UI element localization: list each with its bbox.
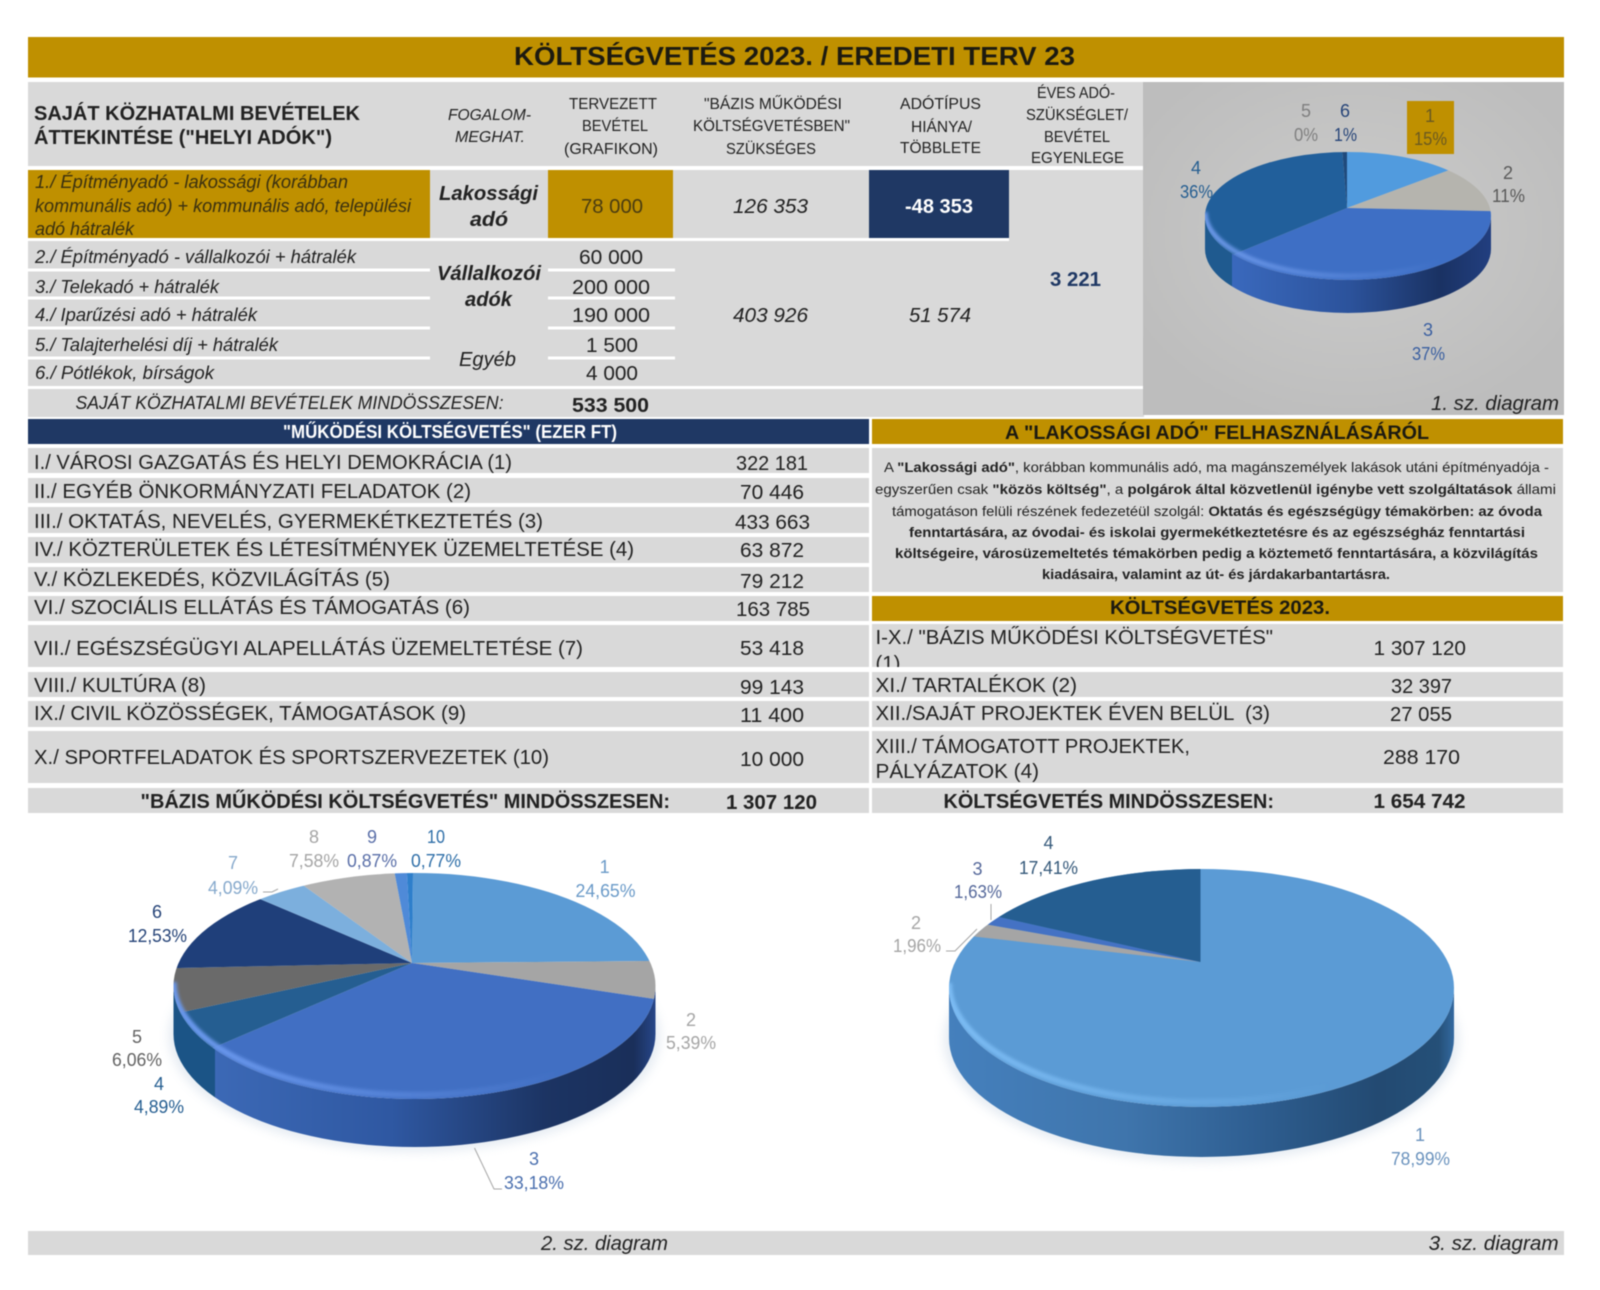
- operating budget rows: VII./ EGÉSZSÉGÜGYI ALAPELLÁTÁS ÜZEMELTETÉSE (7): [34, 637, 583, 660]
- operating budget rows: 99 143: [740, 677, 804, 699]
- table highlight cells: [28, 166, 1144, 389]
- column headers: TERVEZETT: [569, 96, 658, 113]
- budget 2023 rows: I-X./ "BÁZIS MŰKÖDÉSI KÖLTSÉGVETÉS": [876, 626, 1273, 649]
- planned revenue values: 533 500: [572, 395, 649, 417]
- pie 3 labels: 1,63%: [954, 882, 1002, 902]
- pie 1 labels: 15%: [1414, 129, 1447, 149]
- budget 2023 rows: 1 307 120: [1374, 638, 1466, 660]
- column headers: KÖLTSÉGVETÉSBEN": [693, 117, 850, 135]
- pie 2 labels: 4,09%: [208, 878, 258, 898]
- budget 2023 rows: XI./ TARTALÉKOK (2): [876, 674, 1077, 697]
- tax categories: Egyéb: [459, 349, 516, 371]
- planned revenue values: [572, 196, 650, 417]
- operating budget rows: 79 212: [740, 571, 804, 593]
- pie 3 labels: 3: [972, 859, 983, 879]
- tax rows: 5./ Talajterhelési díj + hátralék: [35, 335, 279, 355]
- planned revenue values: 1 500: [586, 335, 638, 357]
- budget 2023 rows: [872, 624, 1563, 813]
- pie 2 labels: 6: [152, 902, 162, 922]
- tax categories: [437, 183, 541, 371]
- operating budget rows: I./ VÁROSI GAZGATÁS ÉS HELYI DEMOKRÁCIA (1): [34, 451, 512, 474]
- pie 2 labels: 9: [367, 827, 377, 847]
- pie 2 labels: 0,87%: [347, 851, 397, 871]
- operating budget rows: [28, 448, 869, 814]
- planned revenue values: 78 000: [581, 196, 643, 218]
- budget 2023 rows: KÖLTSÉGVETÉS MINDÖSSZESEN:: [944, 790, 1274, 813]
- tax rows: kommunális adó) + kommunális adó, települési: [35, 196, 412, 216]
- column headers: [448, 85, 1129, 167]
- base budget need, balance and annual values: 3 221: [1050, 269, 1101, 291]
- tax rows: 1./ Építményadó - lakossági (korábban: [35, 172, 348, 192]
- table heading: [34, 102, 361, 149]
- residential tax explanation: egyszerűen csak "közös költség" , a polgárok által közvetlenül igénybe vett szolgáltatások állami: [875, 481, 1556, 497]
- operating budget rows: VI./ SZOCIÁLIS ELLÁTÁS ÉS TÁMOGATÁS (6): [34, 596, 470, 619]
- footer caption bar: 3. sz. diagram: [1429, 1233, 1559, 1255]
- tax categories: adó: [470, 209, 508, 231]
- pie 3 labels: [893, 833, 1450, 1169]
- footer caption bar: 2. sz. diagram: [540, 1233, 668, 1255]
- operating budget rows: IX./ CIVIL KÖZÖSSÉGEK, TÁMOGATÁSOK (9): [34, 702, 466, 725]
- residential tax explanation: A "Lakossági adó" , korábban kommunális adó, ma magánszemélyek lakások utáni építményadója -: [884, 459, 1549, 475]
- base budget need, balance and annual values: 403 926: [733, 305, 809, 327]
- column headers: MEGHAT.: [455, 129, 525, 146]
- residential tax explanation: költségeire, városüzemeltetés témakörben pedig a köztemető fenntartására, a közvilágítás: [895, 545, 1538, 561]
- pie 1 labels: [1180, 101, 1525, 364]
- budget 2023 rows: PÁLYÁZATOK (4): [876, 760, 1039, 783]
- column headers: HIÁNYA/: [911, 119, 973, 136]
- operating budget rows: 10 000: [740, 749, 804, 771]
- column headers: SZÜKSÉGLET/: [1026, 106, 1129, 124]
- pie 2 labels: 4: [154, 1074, 164, 1094]
- base budget need, balance and annual values: -48 353: [905, 196, 973, 218]
- operating budget rows: 63 872: [740, 540, 804, 562]
- operating budget rows: II./ EGYÉB ÖNKORMÁNYZATI FELADATOK (2): [34, 480, 471, 503]
- tax categories: adók: [465, 289, 513, 311]
- pie chart 3: [942, 868, 1462, 1164]
- budget 2023 rows: 288 170: [1383, 747, 1460, 769]
- operating budget rows: 322 181: [736, 453, 808, 475]
- pie 2 labels: 7: [228, 853, 238, 873]
- operating budget rows: 433 663: [735, 512, 810, 534]
- operating budget header: [28, 419, 869, 444]
- operating budget rows: 70 446: [740, 482, 804, 504]
- pie 2 labels: 4,89%: [134, 1097, 184, 1117]
- pie 2 labels: 7,58%: [289, 851, 339, 871]
- panel: local tax revenue table: [28, 82, 1144, 417]
- tax categories: Lakossági: [439, 183, 538, 205]
- pie 3 labels: 2: [911, 913, 921, 933]
- pie 2 labels: 6,06%: [112, 1050, 162, 1070]
- column headers: SZÜKSÉGES: [726, 140, 816, 158]
- column headers: BEVÉTEL: [1044, 129, 1110, 146]
- pie 3 labels: 1,96%: [893, 936, 941, 956]
- pie 2 labels: 8: [309, 827, 319, 847]
- residential tax explanation: fenntartására, az óvodai- és iskolai gyermekétkeztetésre és az egészségház fenntartási: [909, 524, 1525, 540]
- operating budget rows: 163 785: [736, 599, 810, 621]
- column headers: ÉVES ADÓ-: [1037, 85, 1115, 102]
- title bar: KÖLTSÉGVETÉS 2023. / EREDETI TERV 23: [514, 41, 1075, 71]
- pie 2 labels: 1: [600, 857, 610, 877]
- planned revenue values: 200 000: [572, 277, 650, 299]
- panel: budget 2023 table: [872, 596, 1563, 813]
- pie 2 labels: 24,65%: [576, 881, 636, 901]
- panel: chart 1: [1142, 82, 1564, 416]
- residential tax header: [872, 419, 1563, 444]
- residential tax header: A "LAKOSSÁGI ADÓ" FELHASZNÁLÁSÁRÓL: [1005, 422, 1429, 444]
- pie 2 labels: 5: [132, 1027, 142, 1047]
- residential tax explanation: [872, 448, 1563, 592]
- pie 2 labels: 0,77%: [411, 851, 461, 871]
- residential tax explanation: támogatáson felüli részének fedezetéül szolgál: Oktatás és egészségügy témakörben: az óvoda: [892, 503, 1542, 519]
- pie 3 labels: 17,41%: [1019, 858, 1078, 878]
- table heading: SAJÁT KÖZHATALMI BEVÉTELEK: [34, 102, 361, 125]
- chart 1 caption: 1. sz. diagram: [1431, 393, 1559, 415]
- budget 2023 rows: 27 055: [1390, 704, 1452, 726]
- pie 3 labels: 1: [1415, 1125, 1425, 1145]
- operating budget rows: 11 400: [740, 705, 804, 727]
- residential tax explanation: kiadásaira, valamint az út- és járdakarbantartásra.: [1042, 566, 1390, 582]
- planned revenue values: 60 000: [579, 247, 643, 269]
- tax rows: 4./ Iparűzési adó + hátralék: [35, 305, 258, 325]
- operating budget rows: 53 418: [740, 638, 804, 660]
- budget 2023 rows: (1): [876, 653, 900, 675]
- pie 1 labels: 36%: [1180, 182, 1213, 202]
- pie 2 labels: 12,53%: [128, 926, 187, 946]
- tax rows: adó hátralék: [35, 219, 135, 239]
- pie chart 2: [166, 872, 662, 1154]
- pie 1 labels: 3: [1423, 320, 1433, 340]
- column headers: FOGALOM-: [448, 107, 531, 124]
- planned revenue values: 4 000: [586, 363, 638, 385]
- budget 2023 rows: 32 397: [1391, 676, 1452, 698]
- tax rows: [34, 172, 504, 413]
- title bar: [28, 37, 1564, 78]
- operating budget rows: IV./ KÖZTERÜLETEK ÉS LÉTESÍTMÉNYEK ÜZEMELTETÉSE (4): [34, 538, 634, 561]
- pie 3 labels: 4: [1044, 833, 1054, 853]
- operating budget rows: III./ OKTATÁS, NEVELÉS, GYERMEKÉTKEZTETÉS (3): [34, 510, 543, 533]
- tax rows: 3./ Telekadó + hátralék: [35, 277, 220, 297]
- planned revenue values: 190 000: [572, 305, 650, 327]
- pie chart 1: [1204, 151, 1492, 314]
- pie 1 labels: 2: [1503, 163, 1513, 183]
- pie 1 labels: 37%: [1412, 344, 1445, 364]
- pie 3 labels: 78,99%: [1391, 1149, 1450, 1169]
- tax categories: Vállalkozói: [437, 263, 541, 285]
- pie 1 labels: 1: [1425, 106, 1435, 126]
- pie 1 labels: 1%: [1334, 125, 1357, 145]
- operating budget rows: X./ SPORTFELADATOK ÉS SPORTSZERVEZETEK (10): [34, 746, 549, 769]
- operating budget header: "MŰKÖDÉSI KÖLTSÉGVETÉS" (EZER FT): [283, 421, 617, 442]
- budget 2023 rows: XII./SAJÁT PROJEKTEK ÉVEN BELÜL (3): [876, 702, 1270, 725]
- panel: operating budget table: [28, 419, 869, 814]
- pie 1 labels: 11%: [1492, 186, 1525, 206]
- panel: use of residential tax: [872, 419, 1563, 592]
- budget 2023 header: [872, 596, 1563, 621]
- tax rows: SAJÁT KÖZHATALMI BEVÉTELEK MINDÖSSZESEN:: [76, 393, 504, 413]
- pie 2 labels: 3: [529, 1149, 539, 1169]
- pie 2 labels: 2: [686, 1010, 696, 1030]
- column headers: EGYENLEGE: [1031, 150, 1124, 167]
- column headers: TÖBBLETE: [900, 139, 981, 157]
- column headers: "BÁZIS MŰKÖDÉSI: [704, 95, 842, 113]
- operating budget rows: VIII./ KULTÚRA (8): [34, 674, 206, 697]
- budget 2023 rows: XIII./ TÁMOGATOTT PROJEKTEK,: [876, 735, 1190, 758]
- tax rows: 6./ Pótlékok, bírságok: [35, 363, 215, 383]
- table heading: ÁTTEKINTÉSE ("HELYI ADÓK"): [34, 125, 332, 149]
- pie 2 labels: 5,39%: [666, 1033, 716, 1053]
- column headers: ADÓTÍPUS: [900, 96, 981, 113]
- operating budget rows: "BÁZIS MŰKÖDÉSI KÖLTSÉGVETÉS" MINDÖSSZESEN:: [140, 790, 670, 813]
- base budget need, balance and annual values: 126 353: [733, 196, 808, 218]
- pie 2 labels: [112, 827, 716, 1193]
- column headers: BEVÉTEL: [582, 118, 648, 135]
- footer caption bar: [28, 1231, 1564, 1255]
- pie 1 labels: 6: [1340, 101, 1350, 121]
- tax rows: 2./ Építményadó - vállalkozói + hátralék: [34, 247, 357, 267]
- pie 2 labels: 33,18%: [504, 1173, 564, 1193]
- operating budget rows: V./ KÖZLEKEDÉS, KÖZVILÁGÍTÁS (5): [34, 568, 390, 591]
- pie 1 labels: 4: [1191, 158, 1201, 178]
- budget 2023 header: KÖLTSÉGVETÉS 2023.: [1110, 597, 1330, 619]
- base budget need, balance and annual values: 51 574: [909, 305, 971, 327]
- pie 1 labels: 5: [1301, 101, 1311, 121]
- column headers: (GRAFIKON): [564, 141, 658, 158]
- pie 1 labels: 0%: [1294, 125, 1318, 145]
- base budget need, balance and annual values: [733, 196, 1101, 327]
- pie 2 labels: 10: [427, 827, 445, 847]
- operating budget rows: 1 307 120: [726, 792, 817, 814]
- budget 2023 rows: 1 654 742: [1374, 791, 1466, 813]
